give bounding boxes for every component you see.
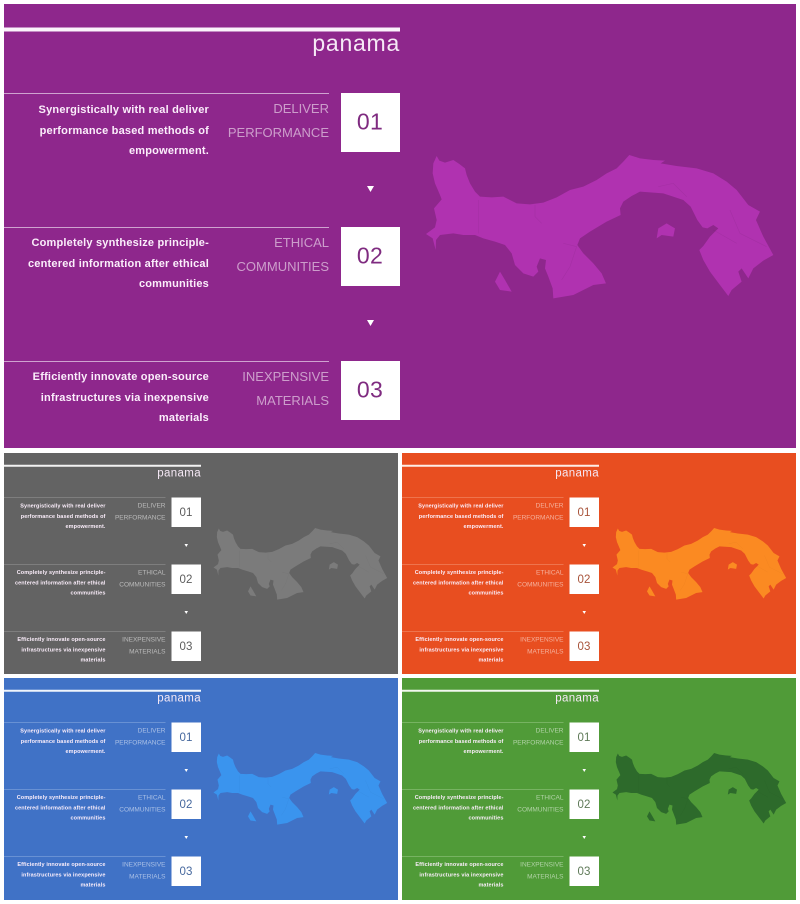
step 02 — [402, 564, 599, 614]
title: panama — [555, 692, 599, 704]
step 03: MATERIALS — [527, 874, 564, 880]
step 01: DELIVER — [536, 728, 564, 734]
step 03: INEXPENSIVE — [520, 862, 564, 868]
step 03: Efficiently innovate open-source — [415, 637, 504, 643]
step 01: PERFORMANCE — [115, 740, 166, 746]
step 03: 03 — [179, 866, 193, 878]
step 03: INEXPENSIVE — [122, 862, 166, 868]
title: panama — [157, 468, 201, 480]
step 03: INEXPENSIVE — [122, 636, 166, 644]
step 02 — [4, 227, 400, 326]
step 01 — [4, 722, 201, 772]
step 02: 02 — [577, 574, 591, 586]
step 01: empowerment. — [463, 524, 504, 530]
step 01: performance based methods of — [40, 125, 209, 137]
map: panama — [612, 528, 786, 600]
step 02: Completely synthesize principle- — [415, 570, 504, 576]
step 03: materials — [80, 658, 106, 664]
step 02: communities — [70, 590, 106, 596]
step 02: ETHICAL — [536, 794, 564, 802]
step 02: centered information after ethical — [28, 258, 209, 270]
step 03: 03 — [179, 641, 193, 653]
step 03: 03 — [577, 641, 591, 653]
step 01: Synergistically with real deliver — [418, 504, 504, 510]
step 02: COMMUNITIES — [119, 582, 166, 588]
step 01: performance based methods of — [419, 514, 504, 520]
step 01: 01 — [577, 507, 591, 519]
title: panama — [157, 692, 201, 704]
step 02: 02 — [577, 799, 591, 811]
step 01: PERFORMANCE — [115, 514, 166, 522]
step 02: COMMUNITIES — [517, 582, 564, 588]
step 01: empowerment. — [65, 749, 106, 755]
step 02: communities — [70, 816, 106, 822]
panel: grey — [4, 453, 398, 674]
map: panama — [213, 753, 387, 825]
step 01: Synergistically with real deliver — [20, 728, 106, 734]
step 01: empowerment. — [463, 749, 504, 755]
step 01: 01 — [577, 732, 591, 744]
step 03: MATERIALS — [129, 648, 166, 656]
step 01: DELIVER — [273, 101, 329, 116]
step 02: communities — [468, 590, 504, 596]
step 03 — [4, 361, 400, 424]
step 03 — [4, 632, 201, 664]
step 01 — [402, 498, 599, 547]
step 02: centered information after ethical — [413, 580, 504, 586]
step 03 — [4, 856, 201, 888]
step 02: COMMUNITIES — [237, 259, 329, 274]
step 01: Synergistically with real deliver — [20, 504, 106, 510]
step 03: infrastructures via inexpensive — [41, 392, 209, 404]
step 01: empowerment. — [129, 145, 209, 157]
step 03: MATERIALS — [129, 874, 166, 880]
step 01: PERFORMANCE — [513, 740, 564, 746]
step 03: 03 — [577, 866, 591, 878]
step 02: centered information after ethical — [15, 806, 106, 812]
step 03: infrastructures via inexpensive — [419, 648, 504, 654]
step 01: 01 — [179, 507, 193, 519]
step 01: DELIVER — [138, 502, 166, 510]
step 03: materials — [159, 412, 209, 424]
step 03: MATERIALS — [256, 393, 329, 408]
map: panama — [426, 155, 773, 298]
step 02: communities — [139, 278, 209, 290]
step 02: ETHICAL — [274, 235, 329, 250]
step 01: DELIVER — [536, 502, 564, 510]
step 02: 02 — [179, 799, 193, 811]
step 01 — [402, 722, 599, 772]
step 01 — [4, 498, 201, 547]
step 03: materials — [80, 882, 106, 888]
map: panama — [213, 528, 387, 600]
panel: green — [402, 678, 796, 900]
step 02 — [4, 564, 201, 614]
step 03: infrastructures via inexpensive — [21, 648, 106, 654]
step 02 — [4, 790, 201, 839]
step 03: MATERIALS — [527, 648, 564, 656]
step 03: Efficiently innovate open-source — [17, 637, 106, 643]
title: panama — [555, 468, 599, 480]
step 01: performance based methods of — [21, 739, 106, 745]
step 01: empowerment. — [65, 524, 106, 530]
step 03: materials — [478, 882, 504, 888]
panel: blue — [4, 678, 398, 900]
step 01: performance based methods of — [419, 739, 504, 745]
panel: orange — [402, 453, 796, 674]
step 02: ETHICAL — [536, 570, 564, 576]
step 03: INEXPENSIVE — [520, 636, 564, 644]
step 01: 01 — [357, 108, 383, 134]
step 02: 02 — [357, 242, 383, 268]
step 01: PERFORMANCE — [228, 125, 329, 140]
step 03: materials — [478, 658, 504, 664]
step 02: centered information after ethical — [15, 580, 106, 586]
step 01 — [4, 93, 400, 192]
step 01: DELIVER — [138, 728, 166, 734]
step 01: 01 — [179, 732, 193, 744]
step 02: ETHICAL — [138, 794, 166, 802]
step 03: infrastructures via inexpensive — [21, 872, 106, 878]
step 02: Completely synthesize principle- — [31, 237, 209, 249]
step 03: Efficiently innovate open-source — [17, 862, 106, 868]
panel: purple main — [4, 4, 796, 448]
title: panama — [312, 30, 400, 56]
step 03: Efficiently innovate open-source — [33, 371, 209, 383]
step 02 — [402, 790, 599, 839]
step 02: Completely synthesize principle- — [17, 570, 106, 576]
map: panama — [612, 753, 786, 825]
step 02: Completely synthesize principle- — [415, 795, 504, 801]
step 02: ETHICAL — [138, 570, 166, 576]
step 01: Synergistically with real deliver — [39, 104, 210, 116]
step 03: 03 — [357, 376, 383, 402]
step 03: Efficiently innovate open-source — [415, 862, 504, 868]
step 02: COMMUNITIES — [517, 806, 564, 814]
step 01: PERFORMANCE — [513, 514, 564, 522]
step 02: 02 — [179, 574, 193, 586]
title — [4, 28, 400, 56]
step 02: COMMUNITIES — [119, 806, 166, 814]
step 03: INEXPENSIVE — [242, 369, 329, 384]
step 03: infrastructures via inexpensive — [419, 872, 504, 878]
step 02: centered information after ethical — [413, 806, 504, 812]
step 03 — [402, 856, 599, 888]
step 03 — [402, 632, 599, 664]
step 01: Synergistically with real deliver — [418, 728, 504, 734]
step 02: Completely synthesize principle- — [17, 795, 106, 801]
step 02: communities — [468, 816, 504, 822]
step 01: performance based methods of — [21, 514, 106, 520]
